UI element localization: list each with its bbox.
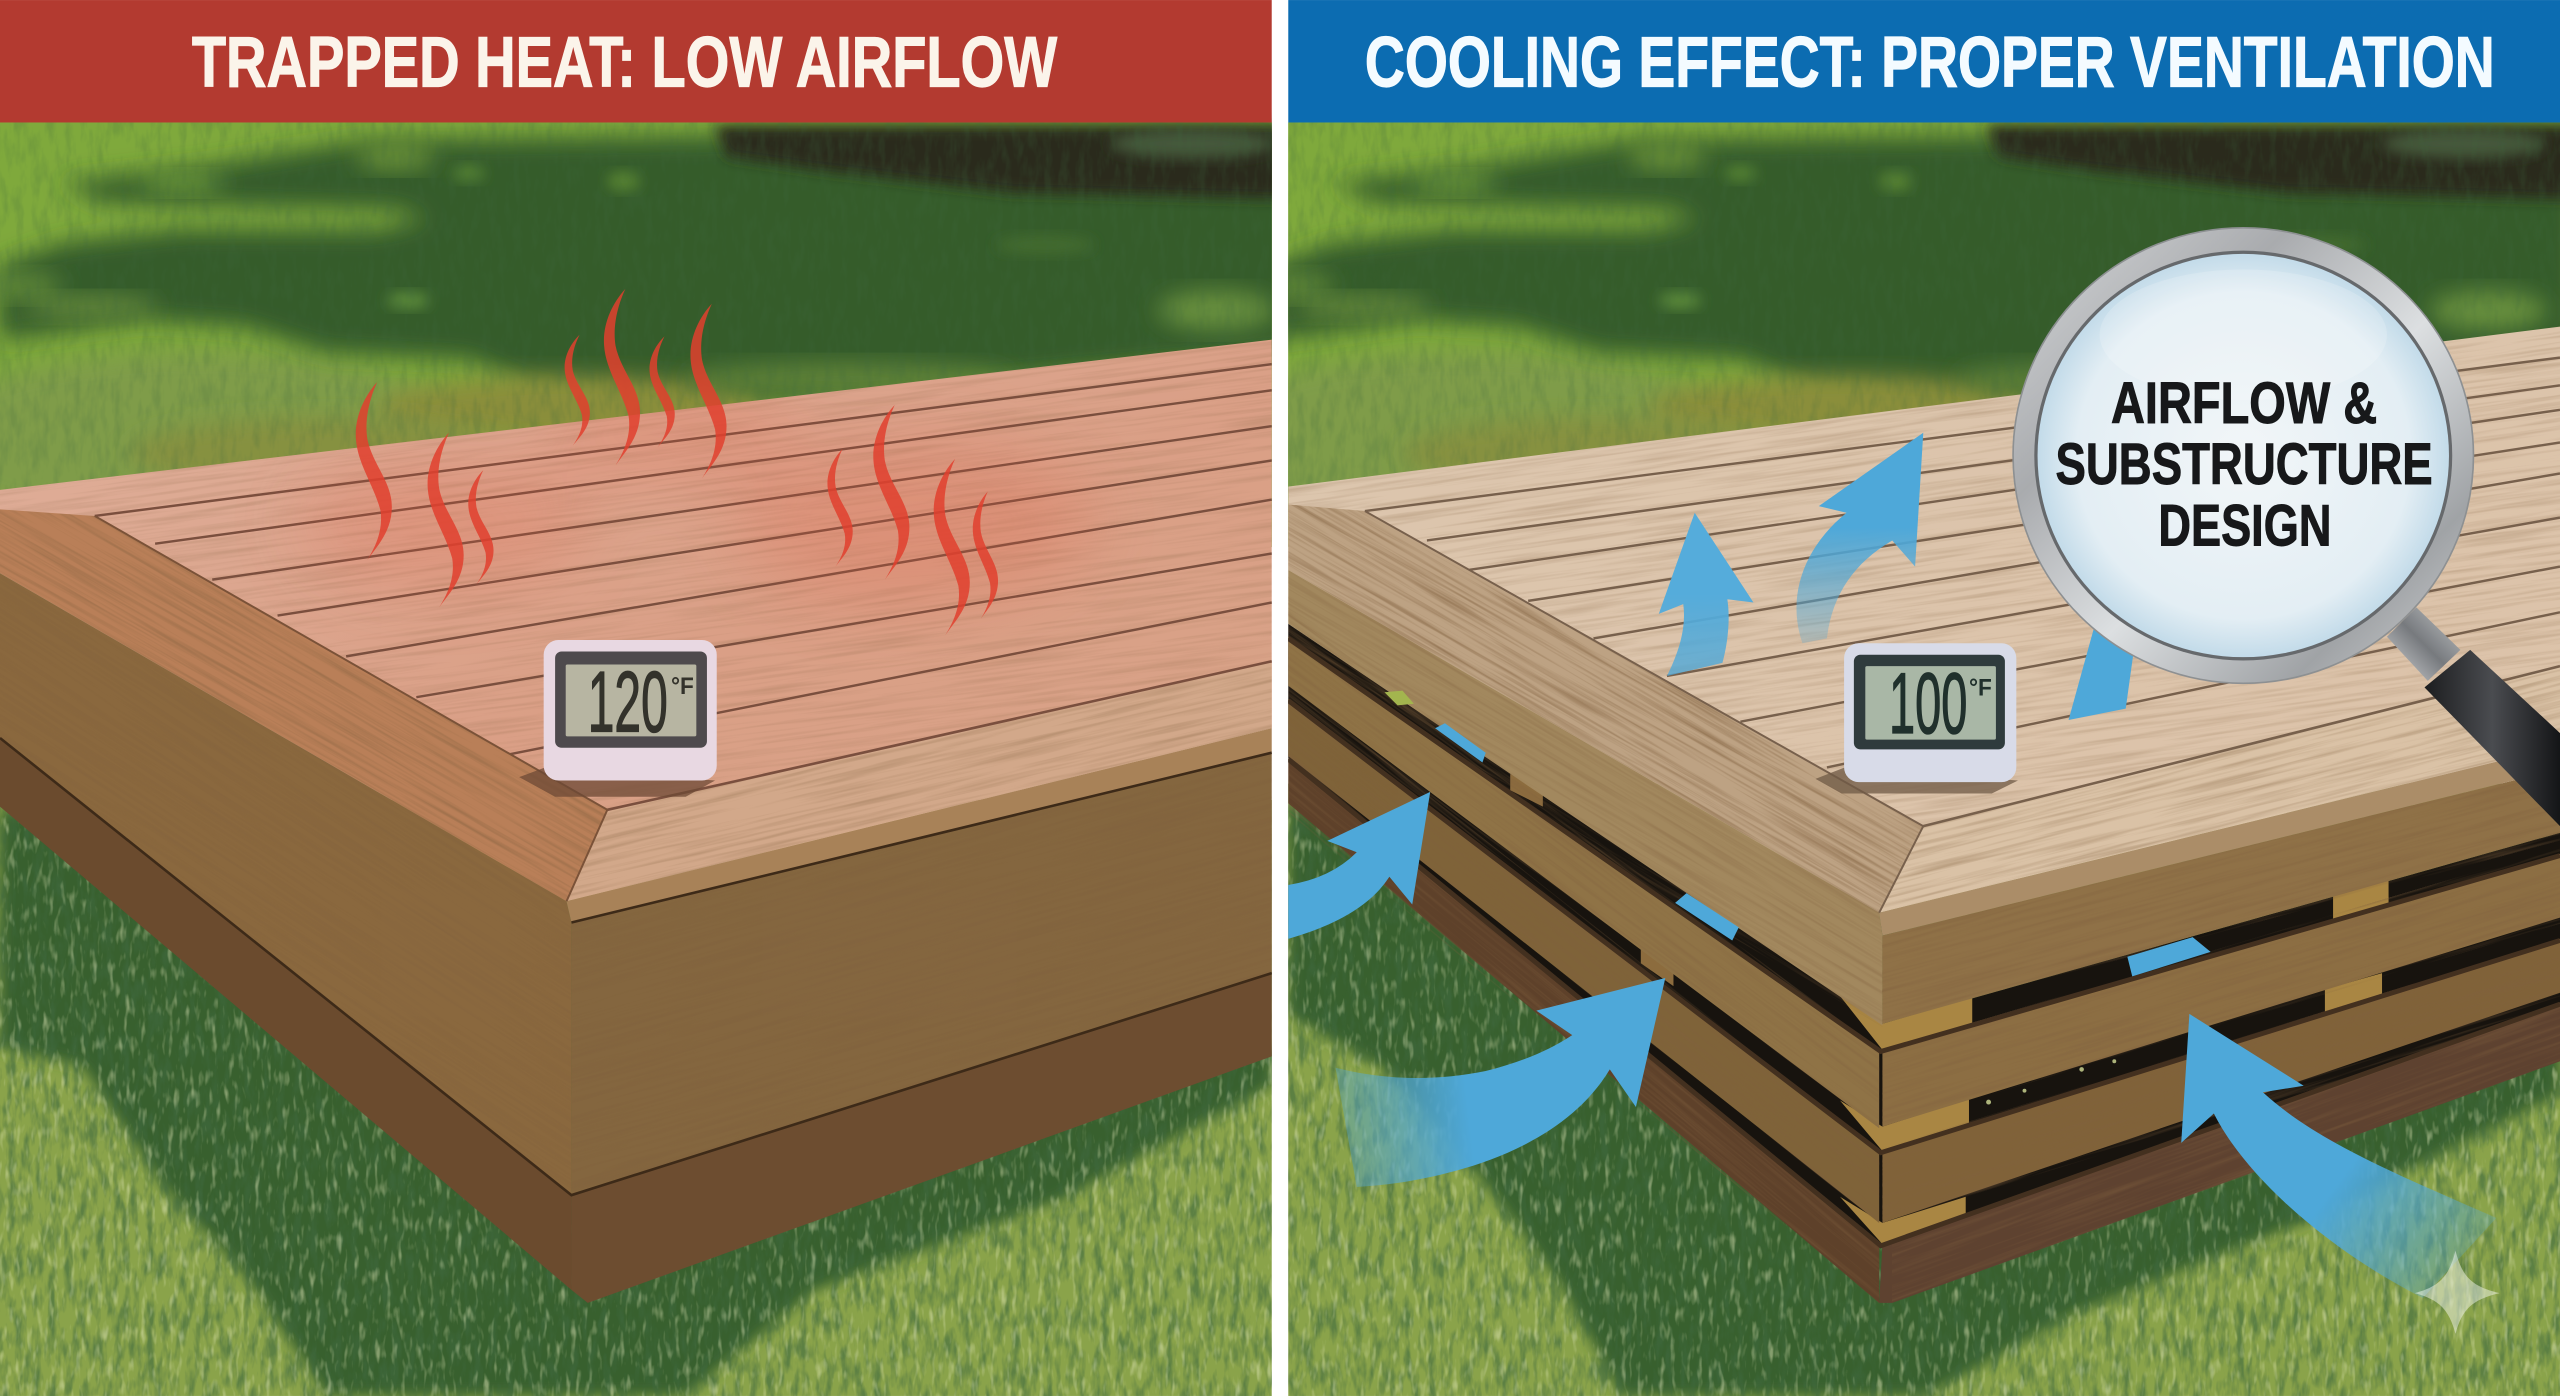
plank gaps: [95, 364, 1272, 754]
panel: cooling effect, proper ventilation: [1190, 0, 2560, 1396]
left fascia: [0, 573, 571, 1195]
heading banner: trapped heat: [0, 0, 1272, 122]
background lawn and bushes: [1190, 122, 2560, 547]
heat glow on deck: [294, 387, 1094, 604]
heading banner: trapped heat: TRAPPED HEAT: LOW AIRFLOW: [192, 23, 1057, 103]
thermometer: 120°F: 120: [588, 654, 668, 750]
callout text: DESIGN: [2158, 493, 2331, 558]
plank grain: [0, 342, 1272, 808]
foreground lawn: [1288, 122, 2560, 1396]
lower right board: [571, 973, 1272, 1303]
thermometer: 100°F: [1816, 643, 2018, 794]
dark top edges of the slats: [1288, 638, 2560, 1246]
magnifier handle: [2424, 650, 2560, 826]
green gap highlight: [1384, 691, 1414, 705]
support posts: [1840, 880, 2389, 1244]
heading banner: cooling effect: [1288, 0, 2560, 122]
arrow: inflow lower left: [1336, 978, 1665, 1187]
thermometer: 100°F: °F: [1969, 675, 1992, 702]
arrow: rising air curved: [1796, 433, 1923, 643]
right picture-frame board: [567, 661, 1272, 901]
right fascia: [571, 753, 1272, 1195]
background lawn and bushes: [0, 122, 1306, 547]
arrow: inflow lower right: [2181, 1014, 2496, 1298]
magnifier collar: [2387, 607, 2460, 681]
magnifier rim: [2013, 228, 2473, 683]
left picture-frame board: [1288, 505, 1923, 913]
magnifier lens: [2038, 254, 2449, 657]
foreground lawn: [0, 122, 1272, 1396]
arrow: rising air left: [1659, 513, 1753, 676]
magnifying glass callout: [2013, 228, 2560, 826]
left picture-frame board: [0, 509, 607, 901]
grass flecks in the vents: [1986, 925, 2484, 1105]
dark void behind slatted skirt: [1288, 624, 2560, 1244]
thermometer: 120°F: °F: [671, 673, 694, 700]
panel: trapped heat, low airflow: [0, 0, 1306, 1396]
blue slivers through the vents: [1435, 723, 2211, 976]
thermometer: 120°F: [519, 640, 717, 797]
plank gaps: [1365, 358, 2560, 767]
sparkle mark: [2415, 1251, 2500, 1334]
deck top planks: [0, 340, 1272, 901]
arrow: rising air behind lens: [2069, 625, 2134, 720]
callout text: AIRFLOW &: [2111, 371, 2377, 436]
deck structure: [0, 324, 1272, 1303]
heat waves: [356, 289, 998, 635]
side skirt boards: [1288, 557, 1882, 1303]
side posts in the left vents: [1510, 774, 1673, 986]
nose highlight: [567, 728, 1272, 922]
nose highlight: [1879, 746, 2560, 936]
lower left board: [0, 738, 571, 1290]
deck structure: [1288, 308, 2560, 1303]
front skirt boards: [1879, 752, 2560, 1303]
deck top planks: [1288, 327, 2560, 913]
arrow: inflow upper left: [1288, 792, 1430, 939]
callout text: SUBSTRUCTURE: [2056, 432, 2433, 497]
callout text: [2056, 371, 2433, 558]
thermometer: 100°F: 100: [1889, 656, 1967, 752]
right picture-frame board: [1879, 666, 2560, 913]
